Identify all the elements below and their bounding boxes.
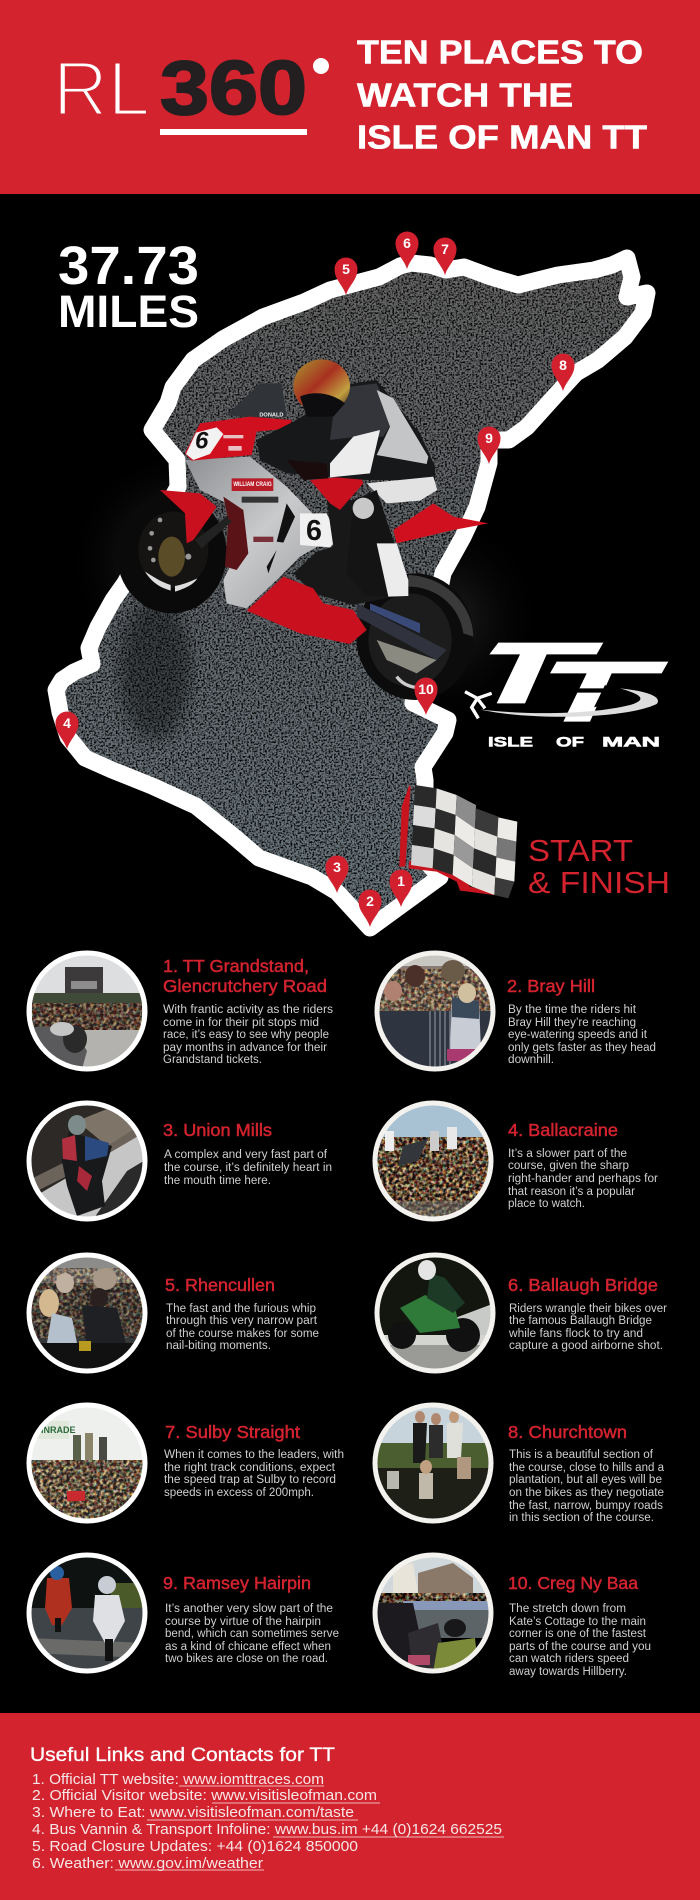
photo 7: sulby straight: INRADE <box>41 1425 76 1435</box>
pin 2: 2 <box>366 893 374 909</box>
pin 7: 7 <box>441 241 449 257</box>
fork and fender <box>160 490 248 570</box>
heading and text 1: With frantic activity as the riders <box>163 1004 333 1016</box>
pin 10 <box>414 678 438 715</box>
heading and text 10: 10. Creg Ny Baa <box>508 1573 638 1593</box>
heading and text 9 <box>163 1573 339 1665</box>
heading and text 9: course by virtue of the hairpin <box>165 1616 321 1628</box>
title: TEN PLACES TO <box>357 34 643 72</box>
heading and text 4: It’s a slower part of the <box>508 1148 627 1160</box>
heading and text 6: 6. Ballaugh Bridge <box>508 1275 658 1295</box>
pin 1 <box>390 870 412 907</box>
pin 6: 6 <box>403 235 411 251</box>
course map <box>56 258 647 928</box>
photo 7: sulby straight <box>27 1403 147 1525</box>
motorcycle and rider <box>117 359 488 700</box>
heading and text 3: the mouth time here. <box>164 1175 271 1187</box>
logo: RL360 <box>53 46 329 135</box>
heading and text 1: Glencrutchery Road <box>163 976 327 996</box>
fairing <box>185 457 335 608</box>
photo 10: creg ny baa <box>373 1553 493 1673</box>
heading and text 2 <box>507 976 656 1066</box>
heading and text 3: 3. Union Mills <box>163 1120 272 1140</box>
pin 8 <box>552 354 574 391</box>
heading and text 10: can watch riders speed <box>509 1653 629 1665</box>
start and finish label <box>528 833 670 900</box>
heading and text 10: parts of the course and you <box>509 1641 651 1653</box>
photo 2: bray hill <box>375 951 495 1071</box>
heading and text 5: nail-biting moments. <box>166 1340 271 1352</box>
footer panel: useful links <box>0 1713 700 1900</box>
rear wheel <box>356 573 474 700</box>
TT Isle of Man logo: MAN <box>602 734 660 750</box>
course distance <box>58 236 199 337</box>
heading and text 9: two bikes are close on the road. <box>165 1653 328 1665</box>
heading and text 5 <box>165 1275 319 1352</box>
footer links: 3. Where to Eat: www.visitisleofman.com/taste <box>32 1804 354 1821</box>
heading and text 6: the famous Ballaugh Bridge <box>509 1315 652 1327</box>
exhaust <box>357 603 447 660</box>
heading and text 1: come in for their pit stops mid <box>163 1017 319 1029</box>
TT Isle of Man logo <box>465 643 668 750</box>
pin 4 <box>56 712 78 749</box>
heading and text 6: while fans flock to try and <box>508 1328 643 1340</box>
heading and text 4 <box>508 1120 658 1210</box>
heading and text 10 <box>508 1573 651 1678</box>
footer links: 4. Bus Vannin & Transport Infoline: www.bus.im +44 (0)1624 662525 <box>32 1821 502 1838</box>
heading and text 8: in this section of the course. <box>509 1512 654 1524</box>
heading and text 10: The stretch down from <box>509 1603 626 1615</box>
belly pan <box>247 577 367 644</box>
pin 3 <box>326 856 348 893</box>
heading and text 7: speeds in excess of 200mph. <box>164 1487 314 1499</box>
footer links: 2. Official Visitor website: www.visitisleofman.com <box>32 1787 377 1804</box>
heading and text 8: the course, close to hills and a <box>509 1462 665 1474</box>
checkered flag <box>399 785 517 898</box>
photo 1: grandstand <box>27 951 147 1071</box>
bike glow <box>65 445 545 730</box>
course distance: MILES <box>58 286 199 337</box>
heading and text 8: This is a beautiful section of <box>509 1449 654 1461</box>
upper fairing: 6 <box>195 427 209 454</box>
title: WATCH THE <box>357 78 573 114</box>
TT Isle of Man logo: OF <box>556 734 585 750</box>
heading and text 8: plantation, but all eyes will be <box>509 1474 662 1486</box>
heading and text 7: 7. Sulby Straight <box>165 1422 300 1442</box>
heading and text 10: corner is one of the fastest <box>509 1628 647 1640</box>
windscreen <box>227 383 287 418</box>
heading and text 1: pay months in advance for their <box>163 1042 327 1054</box>
heading and text 2: only gets faster as they head <box>508 1042 656 1054</box>
footer links <box>32 1771 504 1872</box>
heading and text 2: eye-watering speeds and it <box>508 1029 648 1041</box>
heading and text 1 <box>163 956 333 1066</box>
photo 9: ramsey hairpin <box>27 1553 147 1673</box>
header band <box>0 0 700 194</box>
heading and text 5: through this very narrow part <box>166 1315 318 1327</box>
sponsor label <box>232 478 278 542</box>
heading and text 5: of the course makes for some <box>166 1328 319 1340</box>
pin 6 <box>396 232 418 269</box>
heading and text 7: When it comes to the leaders, with <box>164 1449 344 1461</box>
heading and text 9: It’s another very slow part of the <box>165 1603 333 1615</box>
heading and text 1: Grandstand tickets. <box>163 1054 262 1066</box>
footer links: 6. Weather: www.gov.im/weather <box>32 1855 263 1872</box>
heading and text 9: 9. Ramsey Hairpin <box>163 1573 311 1593</box>
pin 3: 3 <box>333 859 341 875</box>
heading and text 3: the course, it’s definitely heart in <box>164 1162 332 1174</box>
heading and text 6: Riders wrangle their bikes over <box>509 1303 667 1315</box>
pin 9: 9 <box>485 430 493 446</box>
side number panel <box>267 503 338 573</box>
pin 7 <box>434 238 456 275</box>
TT Isle of Man logo: ISLE <box>488 734 533 750</box>
photo 6: ballaugh bridge <box>375 1253 495 1373</box>
pin 5: 5 <box>342 261 350 277</box>
heading and text 10: away towards Hillberry. <box>509 1666 627 1678</box>
pin 2 <box>358 890 382 927</box>
rider <box>257 380 437 597</box>
location pins <box>56 232 574 927</box>
footer heading: Useful Links and Contacts for TT <box>30 1745 335 1766</box>
course distance: 37.73 <box>58 236 199 296</box>
heading and text 8: the fast, narrow, bumpy roads <box>509 1500 663 1512</box>
title: ISLE OF MAN TT <box>357 120 648 156</box>
heading and text 4: place to watch. <box>508 1198 585 1210</box>
photo 3: union mills <box>27 1101 147 1221</box>
heading and text 5: The fast and the furious whip <box>166 1303 316 1315</box>
flag red edge <box>399 785 507 897</box>
side number panel: 6 <box>306 515 322 547</box>
flag checks <box>411 785 517 898</box>
heading and text 1: 1. TT Grandstand, <box>163 956 309 976</box>
heading and text 2: By the time the riders hit <box>508 1004 637 1016</box>
upper fairing: DONALD <box>259 413 284 419</box>
photo 8: churchtown <box>373 1403 493 1523</box>
engine <box>293 500 393 605</box>
heading and text 10: Kate’s Cottage to the main <box>509 1616 646 1628</box>
footer links: 1. Official TT website: www.iomttraces.com <box>32 1771 324 1788</box>
heading and text 2: 2. Bray Hill <box>507 976 595 996</box>
logo: RL360: RL <box>53 46 150 132</box>
heading and text 1: race, it’s easy to see why people <box>163 1029 329 1041</box>
pin 8: 8 <box>559 357 567 373</box>
pin 5 <box>334 258 358 295</box>
heading and text 4: right-hander and perhaps for <box>508 1173 658 1185</box>
logo: RL360: 360 <box>160 46 307 131</box>
heading and text 8: on the bikes as they negotiate <box>509 1487 664 1499</box>
pin 1: 1 <box>397 873 405 889</box>
start and finish label: & FINISH <box>528 865 670 900</box>
heading and text 7: the right track conditions, expect <box>164 1462 336 1474</box>
heading and text 2: downhill. <box>508 1054 554 1066</box>
heading and text 5: 5. Rhencullen <box>165 1275 275 1295</box>
pin 4: 4 <box>63 715 71 731</box>
heading and text 9: bend, which can sometimes serve <box>165 1628 339 1640</box>
upper fairing <box>185 413 292 461</box>
pin 10: 10 <box>418 681 434 697</box>
heading and text 4: 4. Ballacraine <box>508 1120 618 1140</box>
heading and text 4: that reason it’s a popular <box>508 1186 635 1198</box>
heading and text 8 <box>508 1422 665 1524</box>
photo 5: rhencullen <box>27 1253 147 1373</box>
heading and text 6: capture a good airborne shot. <box>509 1340 663 1352</box>
title <box>357 34 648 156</box>
start and finish label: START <box>528 833 633 868</box>
heading and text 6 <box>508 1275 667 1352</box>
footer links: 5. Road Closure Updates: +44 (0)1624 850000 <box>32 1838 358 1855</box>
heading and text 2: Bray Hill they’re reaching <box>508 1017 636 1029</box>
helmet <box>293 359 350 417</box>
heading and text 8: 8. Churchtown <box>508 1422 627 1442</box>
heading and text 7 <box>164 1422 344 1499</box>
heading and text 3: A complex and very fast part of <box>164 1149 328 1161</box>
photo 4: ballacraine <box>373 1101 493 1221</box>
heading and text 9: as a kind of chicane effect when <box>165 1641 331 1653</box>
heading and text 3 <box>163 1120 332 1187</box>
heading and text 7: the speed trap at Sulby to record <box>164 1474 336 1486</box>
sponsor label: WILLIAM CRAIG <box>233 482 272 488</box>
pin 9 <box>478 426 500 464</box>
heading and text 4: course, given the sharp <box>508 1160 629 1172</box>
front wheel <box>117 493 227 613</box>
rear tail <box>310 475 488 543</box>
